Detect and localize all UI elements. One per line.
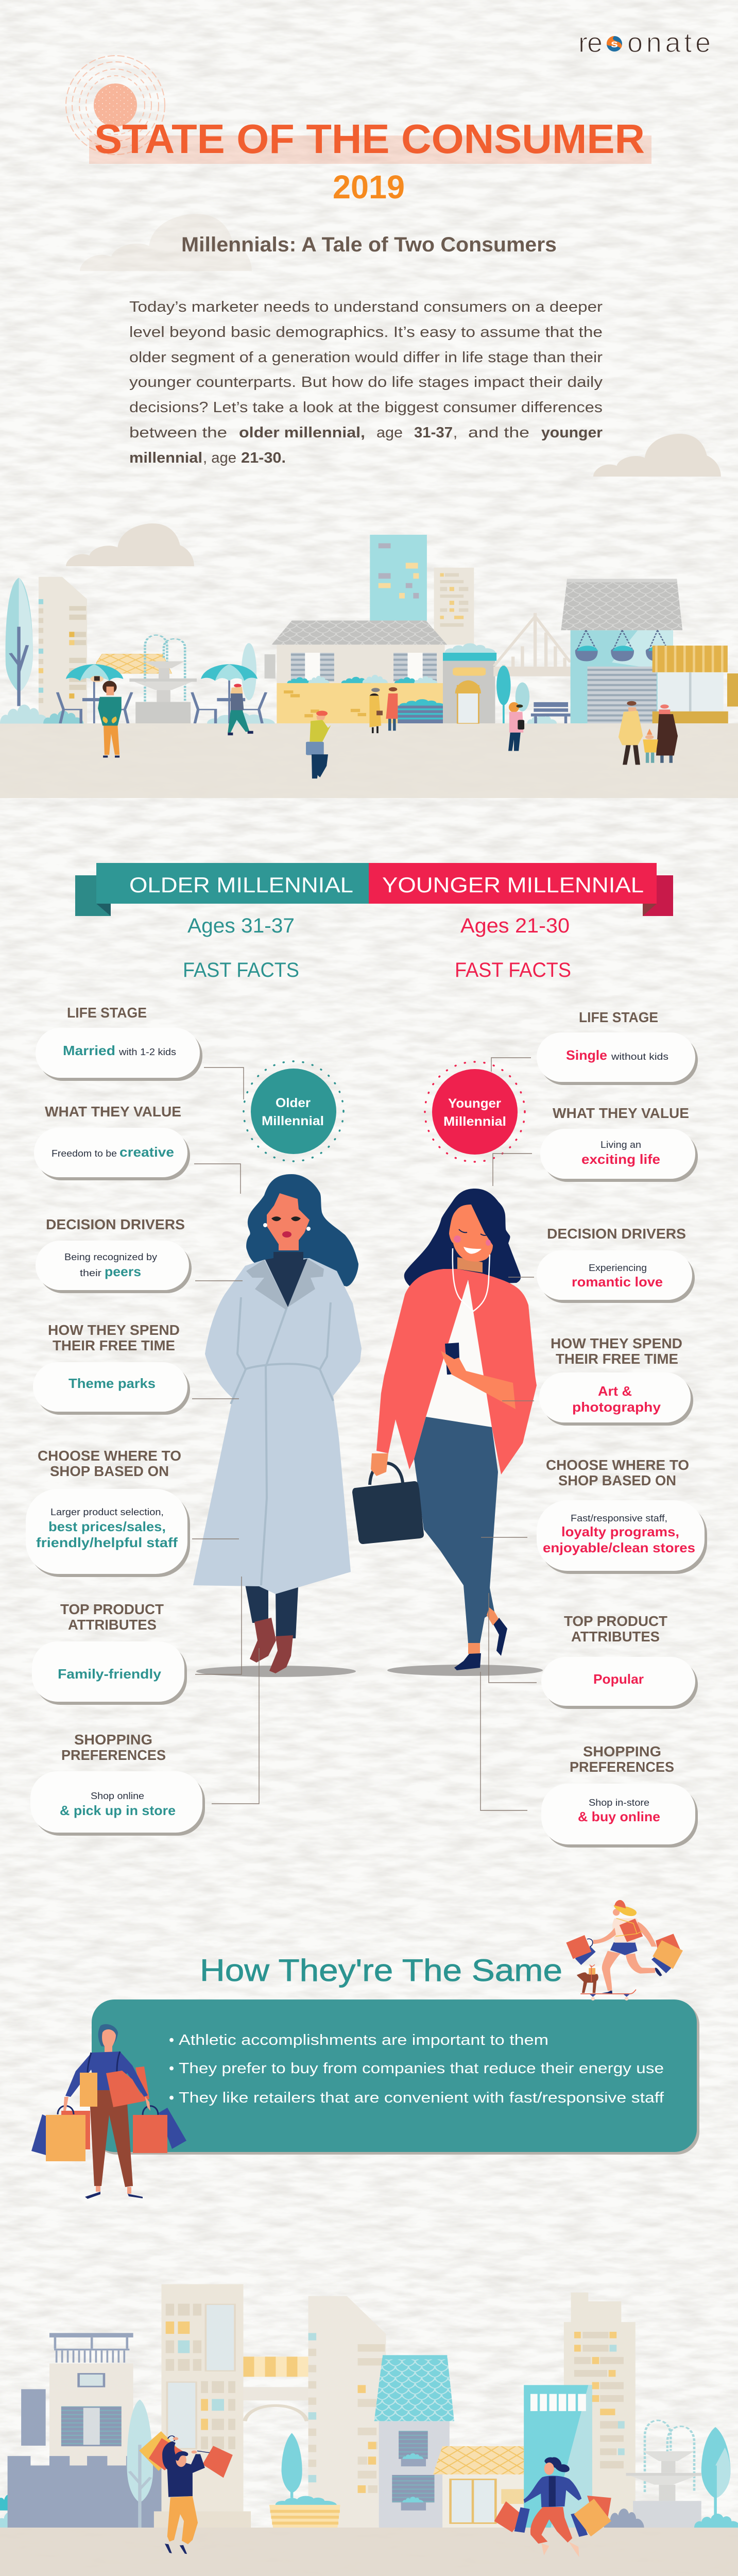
lips (282, 1231, 291, 1238)
person: walking with phone (306, 710, 331, 778)
label: top product attributes: TOP PRODUCT (564, 1613, 667, 1629)
intro text block: 21-30. (241, 450, 286, 466)
figure: skater girl with bags and dog (566, 1900, 683, 2001)
collar (246, 1259, 324, 1310)
left bushes (0, 2494, 50, 2528)
diamond awning (96, 654, 172, 673)
hair (404, 1189, 521, 1286)
label: how they spend (551, 1335, 682, 1367)
bag behind (135, 2066, 149, 2101)
back tower (564, 2293, 636, 2528)
hand on bag (371, 1453, 388, 1476)
badge: older millennial: Millennial (262, 1114, 324, 1128)
card: creative (34, 1128, 190, 1180)
cottage with scaled roof (271, 620, 447, 723)
earrings (263, 1223, 267, 1227)
diamond-roof shop (433, 2446, 524, 2528)
grey bush (604, 2509, 644, 2528)
ankles (96, 2186, 131, 2194)
label: choose where to shop (38, 1448, 181, 1479)
card: married: Married (63, 1043, 115, 1058)
badge: younger millennial: Younger (448, 1096, 501, 1111)
coat seams (231, 1297, 333, 1585)
card: exciting life (540, 1129, 698, 1182)
bags right (159, 2108, 186, 2149)
badge: younger millennial: Millennial (443, 1114, 506, 1129)
neck (457, 1257, 483, 1273)
card: romantic love (537, 1250, 695, 1303)
handbag (370, 1463, 403, 1485)
card: art and photography (539, 1372, 693, 1426)
cafe table with umbrella 1 (57, 664, 132, 723)
card: family friendly: Family-friendly (58, 1666, 162, 1682)
face (449, 1205, 493, 1262)
intro text block: millennial (129, 450, 202, 466)
similarity 2: They prefer to buy from companies that reduce their energy use (179, 2060, 664, 2077)
building with large windows (154, 2284, 251, 2528)
fast facts older heading: FAST FACTS (183, 959, 299, 981)
ages older: Ages 31-37 (187, 914, 295, 937)
card: art and photography: Art & (598, 1383, 632, 1399)
card: exciting life: exciting life (581, 1151, 660, 1167)
straps (88, 2052, 120, 2073)
bullet 3: • (169, 2090, 174, 2106)
similarity 3: They like retailers that are convenient with fast/responsive staff (179, 2090, 664, 2106)
illustration: shopping street (0, 2284, 738, 2528)
label: top product attributes: TOP PRODUCT (60, 1601, 164, 1617)
card: creative: Freedom to be (52, 1148, 117, 1159)
teal-roof house (374, 2355, 454, 2528)
older column (26, 1005, 205, 1836)
similarity 1: Athletic accomplishments are important to them (179, 2032, 548, 2048)
label: how they spend: HOW THEY SPEND (551, 1335, 682, 1351)
ages younger: Ages 21-30 (460, 914, 570, 937)
card: peers: peers (105, 1264, 141, 1279)
jacket (376, 1269, 537, 1475)
coat (193, 1258, 362, 1594)
ground: shopping street (0, 2528, 738, 2576)
hands (63, 2096, 150, 2111)
intro text block (129, 299, 603, 466)
intro text block: between the (129, 425, 227, 441)
card: theme parks: Theme parks (68, 1376, 156, 1391)
label: decision drivers: DECISION DRIVERS (46, 1216, 185, 1232)
banner: younger millennial: YOUNGER MILLENNIAL (382, 873, 644, 897)
red bag (106, 2071, 145, 2107)
card: romantic love: romantic love (572, 1274, 663, 1290)
legs (245, 1582, 298, 1638)
card: pick up in store: Shop online (91, 1791, 144, 1801)
person: woman in red cap (228, 684, 253, 735)
hair (246, 1174, 358, 1286)
beige tower (434, 568, 474, 645)
label: how they spend (48, 1322, 180, 1353)
figure: jumping man with bags (139, 2431, 233, 2554)
card: buy online: Shop in-store (589, 1798, 649, 1808)
title highlight band (89, 135, 651, 164)
label: choose where to shop: CHOOSE WHERE TO (546, 1457, 689, 1473)
people: two friends talking (369, 687, 398, 733)
figure: younger millennial woman (352, 1189, 543, 1676)
intro text block: and the (468, 425, 529, 441)
card: loyalty programs: loyalty programs, (561, 1524, 679, 1539)
fountain (626, 2420, 701, 2528)
tree behind cafe (242, 643, 256, 700)
label: top product attributes (60, 1601, 164, 1633)
intro text block: decisions? Let’s take a look at the biggest consumer differences (129, 399, 603, 416)
shadow (387, 1665, 543, 1676)
intro text block: older millennial, (239, 425, 365, 441)
tower house (49, 2333, 133, 2465)
label: choose where to shop: CHOOSE WHERE TO (38, 1448, 181, 1464)
castle wall (8, 2456, 162, 2528)
shoes (85, 2192, 143, 2199)
card: loyalty programs: enjoyable/clean stores (543, 1540, 695, 1555)
label: shopping preferences: PREFERENCES (570, 1759, 674, 1775)
intro text block: older segment of a generation would differ in life stage than their (129, 349, 603, 366)
banner: older millennial (96, 863, 369, 904)
shadow (196, 1666, 356, 1677)
badge: older millennial (244, 1061, 344, 1161)
right tree (694, 2427, 738, 2528)
cloud behind subtitle (80, 214, 252, 271)
card: pick up in store: & pick up in store (60, 1803, 176, 1818)
label: how they spend: THEIR FREE TIME (556, 1351, 678, 1367)
tall tree (127, 2399, 153, 2528)
left tree (6, 578, 33, 706)
intro text block: age (376, 425, 403, 441)
person: woman with phone and orange trousers (98, 681, 122, 758)
hanging sign (21, 2389, 46, 2446)
turtleneck (265, 1252, 307, 1307)
card: prices and staff (26, 1489, 190, 1577)
card: married: with 1-2 kids (118, 1047, 176, 1057)
label: shopping preferences (61, 1732, 166, 1763)
slanted building (308, 2296, 386, 2528)
fast facts younger heading: FAST FACTS (455, 959, 571, 981)
head and neck (102, 2029, 116, 2053)
bullet 2: • (169, 2060, 174, 2077)
card: popular (541, 1657, 698, 1709)
yellow bag (80, 2073, 97, 2107)
badge: older millennial: Older (276, 1096, 311, 1110)
intro text block: level beyond basic demographics. It’s easy to assume that the (129, 324, 603, 341)
card: prices and staff: best prices/sales, (48, 1519, 166, 1534)
card: single: without kids (611, 1052, 668, 1062)
label: life stage: LIFE STAGE (579, 1009, 658, 1025)
cloud over street scene (66, 523, 194, 566)
bullet 1: • (169, 2032, 174, 2048)
bushes left (0, 705, 275, 723)
title: STATE OF THE CONSUMER (94, 116, 645, 162)
banner: younger millennial (369, 863, 657, 904)
label: what they value: WHAT THEY VALUE (553, 1105, 689, 1121)
label: shopping preferences: SHOPPING (583, 1743, 661, 1759)
connecting awning (243, 2357, 308, 2377)
figure: man with shopping bags (31, 2024, 186, 2199)
intro text block: 31-37 (414, 425, 453, 441)
label: choose where to shop: SHOP BASED ON (50, 1463, 169, 1479)
smile (464, 1247, 482, 1254)
label: shopping preferences: SHOPPING (74, 1732, 152, 1748)
card: family friendly (32, 1641, 187, 1705)
card: exciting life: Living an (600, 1140, 641, 1150)
logo: resonate top: s (611, 38, 618, 50)
banner: older millennial: OLDER MILLENNIAL (129, 873, 353, 897)
label: choose where to shop (546, 1457, 689, 1488)
striped planter (398, 699, 450, 723)
boots (250, 1618, 293, 1673)
card: married (36, 1028, 202, 1081)
connector lines (192, 1058, 537, 1810)
heading: how they're the same: How They're The Same (200, 1953, 562, 1988)
card: prices and staff: friendly/helpful staff (36, 1535, 178, 1550)
yellow stall (653, 646, 738, 723)
card: popular: Popular (593, 1671, 644, 1687)
logo: resonate top: onate (627, 27, 711, 58)
card: peers (36, 1241, 192, 1293)
hair (98, 2024, 118, 2046)
label: choose where to shop: SHOP BASED ON (558, 1472, 676, 1488)
panel: similarities (92, 1999, 699, 2155)
intro text block: younger counterparts. But how do life stages impact their daily (129, 374, 603, 391)
teal building (524, 2385, 592, 2528)
front shoe (454, 1653, 481, 1670)
cafe table with umbrella 2 (192, 664, 266, 723)
card: buy online: & buy online (578, 1809, 660, 1824)
icon: sun with dashed rings (66, 56, 165, 155)
hanging sign (265, 654, 276, 679)
label: shopping preferences (570, 1743, 674, 1775)
figure: older millennial woman (193, 1174, 362, 1677)
bags left (31, 2114, 46, 2155)
eyes (271, 1216, 301, 1221)
label: what they value: WHAT THEY VALUE (45, 1104, 181, 1120)
card: romantic love: Experiencing (589, 1263, 647, 1273)
card: buy online (541, 1784, 698, 1848)
badge: younger millennial (425, 1062, 525, 1162)
family group on the right (619, 701, 678, 765)
logo: resonate top (578, 27, 711, 58)
trousers (90, 2090, 133, 2187)
small trees (496, 666, 557, 723)
intro text block: , (453, 425, 457, 441)
blush (454, 1235, 461, 1243)
eyes closed (459, 1229, 489, 1235)
bridge (494, 613, 571, 675)
younger column (537, 1009, 707, 1848)
figure: jumping woman with bags (494, 2457, 611, 2557)
tall beige building left (39, 577, 87, 723)
back shoe (493, 1618, 507, 1656)
logo: resonate top: re (578, 27, 603, 58)
banner ribbon: tails (75, 875, 673, 916)
white top (426, 1279, 492, 1427)
ground: street scene (0, 723, 738, 798)
ankle (468, 1643, 480, 1654)
teal tower (370, 535, 427, 621)
label: how they spend: THEIR FREE TIME (53, 1337, 175, 1353)
card: prices and staff: Larger product selection, (50, 1507, 164, 1517)
illustration: street scene (0, 535, 738, 778)
cloud right of intro (593, 434, 721, 477)
arm (441, 1351, 516, 1409)
card: single (537, 1032, 698, 1085)
earphones (453, 1248, 490, 1311)
shop with awning door (443, 643, 496, 723)
label: how they spend: HOW THEY SPEND (48, 1322, 180, 1338)
card: single: Single (566, 1047, 607, 1063)
card: peers: Being recognized by (64, 1252, 157, 1262)
label: top product attributes (564, 1613, 667, 1645)
subtitle: Millennials: A Tale of Two Consumers (181, 233, 557, 256)
label: life stage: LIFE STAGE (67, 1005, 147, 1021)
person: pink jacket (508, 702, 524, 751)
card: art and photography: photography (572, 1399, 661, 1415)
label: top product attributes: ATTRIBUTES (68, 1617, 157, 1633)
potted tree (269, 2433, 340, 2528)
label: decision drivers: DECISION DRIVERS (547, 1226, 686, 1242)
arch bridge (243, 2387, 308, 2421)
intro text block: younger (541, 425, 603, 441)
park bench (531, 702, 571, 723)
card: theme parks (33, 1362, 190, 1415)
trousers (414, 1417, 498, 1643)
year: 2019 (333, 168, 405, 206)
card: peers: their (80, 1268, 101, 1278)
intro text block: , age (203, 450, 236, 466)
intro text block: Today’s marketer needs to understand consumers on a deeper (129, 299, 603, 315)
card: creative: creative (119, 1144, 174, 1160)
card: loyalty programs (537, 1500, 707, 1574)
label: shopping preferences: PREFERENCES (61, 1747, 166, 1763)
label: top product attributes: ATTRIBUTES (571, 1629, 660, 1645)
blue shop with scale roof (561, 579, 682, 723)
phone (445, 1343, 460, 1375)
fountain (129, 635, 197, 723)
face (267, 1193, 310, 1250)
card: loyalty programs: Fast/responsive staff, (571, 1513, 667, 1523)
sweater (65, 2052, 148, 2097)
card: pick up in store (30, 1771, 205, 1836)
